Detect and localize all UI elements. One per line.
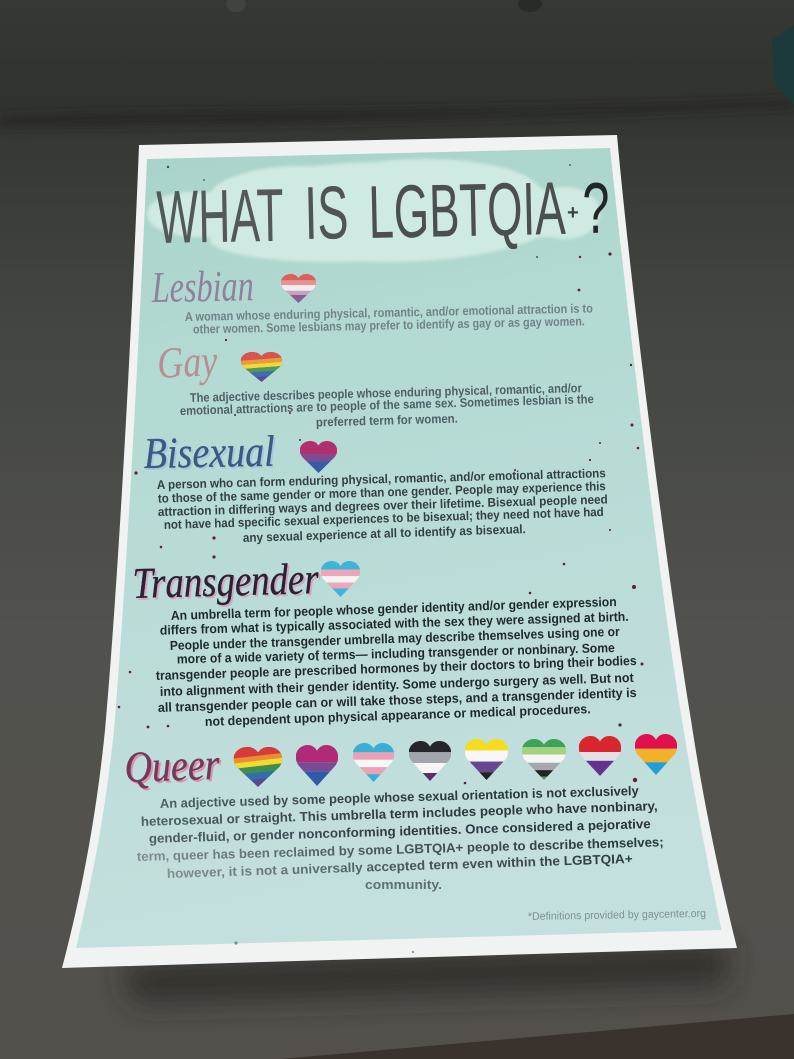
transgender definition: more of a wide variety of terms— including transgender or nonbinary. Some <box>177 640 615 666</box>
speckles <box>118 164 643 953</box>
heading: Queer: Queer <box>124 740 221 792</box>
heading: Transgender: Transgender <box>134 556 322 610</box>
transgender definition: differs from what is typically associated with the sex they were assigned at birth. <box>160 609 629 638</box>
section: lesbian <box>152 270 592 334</box>
bisexual definition: to those of the same gender or more than one gender. People may experience this <box>158 479 606 506</box>
poster sheet <box>62 135 737 968</box>
footnote: *Definitions provided by gaycenter.org <box>528 908 706 923</box>
icon: lesbian heart <box>579 736 621 776</box>
icon: nonbinary heart <box>465 739 508 780</box>
transgender definition: not dependent upon physical appearance or medical procedures. <box>205 701 591 729</box>
icon: transgender heart <box>321 561 360 597</box>
queer definition: community. <box>365 877 442 892</box>
bisexual definition: any sexual experience at all to identify as bisexual. <box>243 522 526 545</box>
title: WHAT <box>156 173 284 259</box>
shadow under poster <box>120 945 730 1003</box>
icon: bisexual heart <box>300 441 337 473</box>
bisexual definition: A person who can form enduring physical, romantic, and/or emotional attractions <box>157 466 606 492</box>
poster panel <box>76 148 722 948</box>
icon: transgender heart <box>353 743 394 782</box>
title: IS <box>304 170 349 255</box>
heading: Lesbian: Lesbian <box>151 261 254 312</box>
bisexual definition: attraction in differing ways and degrees over their lifetime. Bisexual people need <box>158 492 608 519</box>
lesbian definition: other women. Some lesbians may prefer to identify as gay or as gay women. <box>193 314 585 336</box>
icon: rainbow heart <box>240 352 282 382</box>
heading: Transgender: Transgender <box>132 554 320 608</box>
icon: bisexual heart <box>296 745 338 786</box>
gay definition <box>180 381 594 429</box>
lesbian definition <box>185 301 593 336</box>
transgender definition: An umbrella term for people whose gender identity and/or gender expression <box>171 594 617 623</box>
gay definition: The adjective describes people whose enduring physical, romantic, and/or <box>190 381 582 405</box>
icon: asexual heart <box>409 741 451 781</box>
icon row: pride hearts <box>220 734 677 787</box>
queer definition: An adjective used by some people whose sexual orientation is not exclusively <box>160 783 640 811</box>
gay definition: preferred term for women. <box>316 412 458 429</box>
queer definition: heterosexual or straight. This umbrella term includes people who have nonbinary, <box>141 798 658 829</box>
icon: pansexual heart <box>635 734 677 775</box>
icon: aromantic heart <box>522 739 566 780</box>
cloud behind title <box>147 159 600 262</box>
heading: Queer: Queer <box>126 742 223 794</box>
title: + <box>567 202 579 224</box>
transgender definition <box>156 594 637 729</box>
queer definition: however, it is not a universally accepted term even within the LGBTQIA+ <box>167 851 633 881</box>
section: bisexual <box>143 427 608 545</box>
queer definition: term, queer has been reclaimed by some LGBTQIA+ people to describe themselves; <box>137 834 664 864</box>
transgender definition: People under the transgender umbrella may describe themselves using one or <box>170 624 620 653</box>
title: ? <box>582 169 610 249</box>
icon: lesbian heart <box>281 274 316 303</box>
title <box>156 166 610 259</box>
lesbian definition: A woman whose enduring physical, romantic, and/or emotional attraction is to <box>185 301 593 324</box>
icon: rainbow heart <box>234 747 282 787</box>
heading: Gay: Gay <box>156 336 219 388</box>
section: transgender <box>132 554 637 729</box>
bisexual definition: not have had specific sexual experiences to be bisexual; they need not have had <box>164 505 604 532</box>
queer definition: gender-fluid, or gender nonconforming identities. Once considered a pejorative <box>149 816 651 846</box>
heading: Bisexual: Bisexual <box>143 427 275 478</box>
transgender definition: into alignment with their gender identity. Some undergo surgery as well. But not <box>160 670 635 699</box>
transgender definition: transgender people are prescribed hormones by their doctors to bring their bodies <box>156 653 637 683</box>
queer definition <box>137 783 664 892</box>
title: LGBTQIA <box>368 166 566 254</box>
bisexual definition <box>157 466 608 545</box>
heading: Bisexual: Bisexual <box>145 429 277 480</box>
transgender definition: all transgender people can or will take those steps, and a transgender identity is <box>158 685 637 715</box>
gay definition: emotional attractions are to people of the same sex. Sometimes lesbian is the <box>180 392 594 418</box>
section: queer <box>124 734 677 892</box>
section: gay <box>159 348 594 430</box>
